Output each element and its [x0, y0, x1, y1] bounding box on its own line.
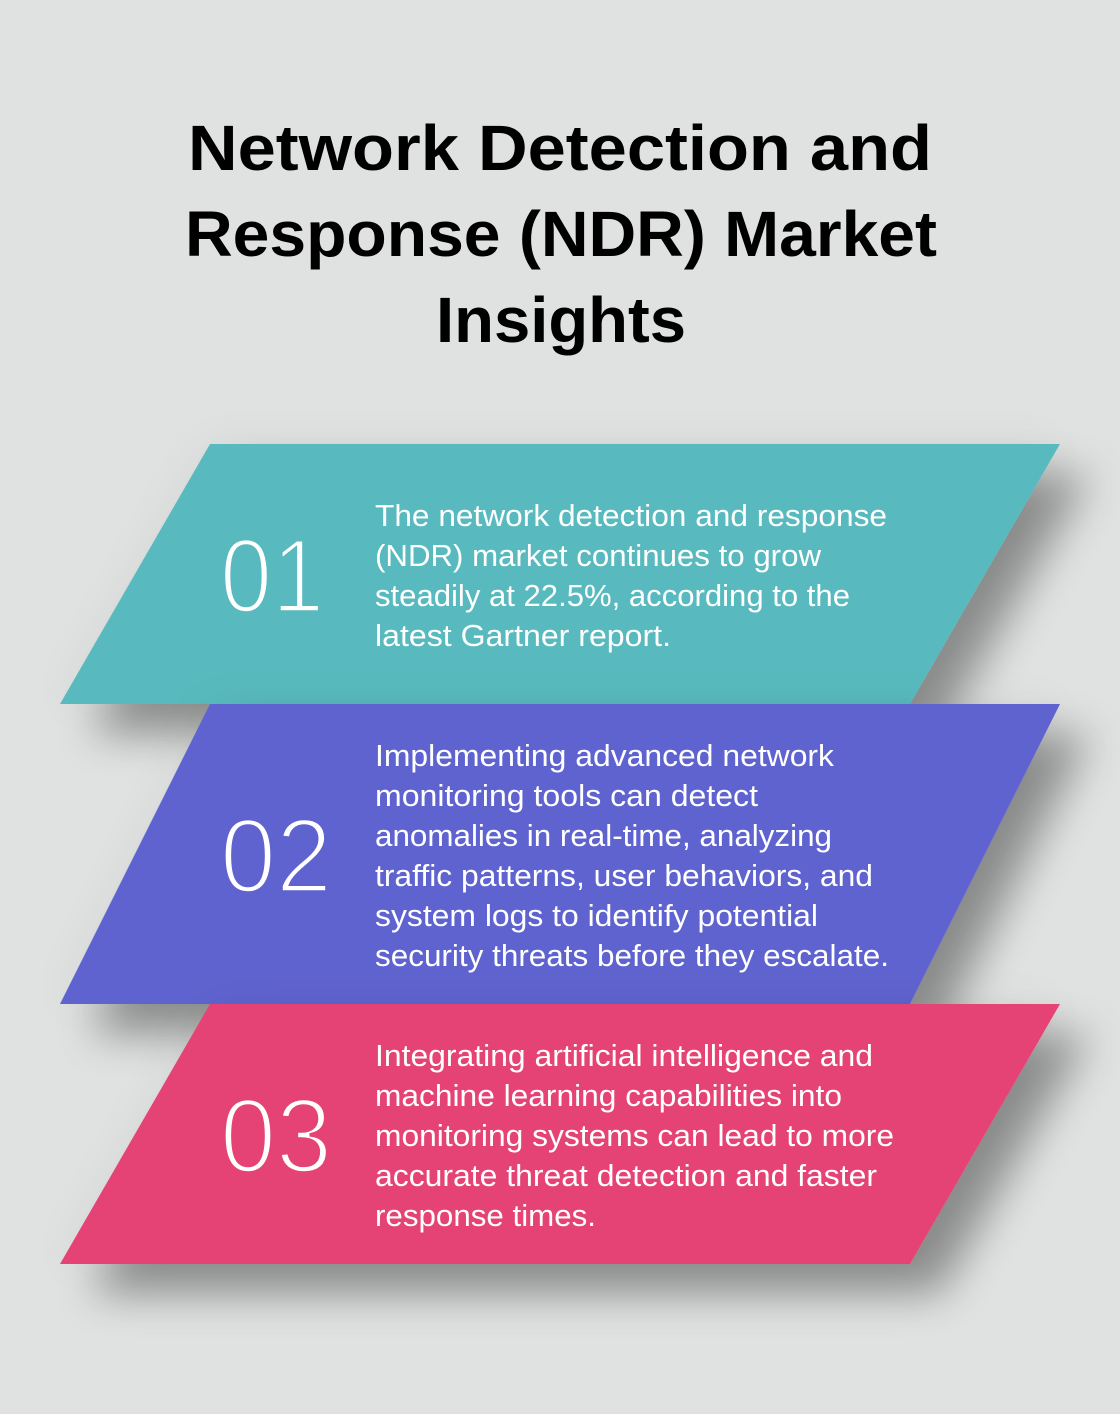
text: network monitoring: security threats before they escalate. [375, 938, 889, 973]
text: market growth: latest Gartner report. [375, 618, 671, 653]
text: AI and machine learning: machine learning capabilities into [375, 1078, 842, 1113]
text: AI and machine learning [375, 1038, 894, 1233]
text: market growth: (NDR) market continues to grow [375, 538, 822, 573]
text: network monitoring: Implementing advanced network [375, 738, 835, 773]
title: Insights [436, 284, 686, 356]
text: AI and machine learning: accurate threat detection and faster [375, 1158, 877, 1193]
title [185, 112, 937, 356]
text: network monitoring: monitoring tools can detect [375, 778, 758, 813]
blue parallelogram [60, 704, 1060, 1004]
text: market growth: steadily at 22.5%, according to the [375, 578, 850, 613]
text: network monitoring: system logs to identify potential [375, 898, 818, 933]
panel: 03 AI and machine learning [60, 1004, 1060, 1264]
teal parallelogram [60, 444, 1060, 704]
number 02: 02 [220, 798, 332, 915]
text: AI and machine learning: monitoring systems can lead to more [375, 1118, 894, 1153]
title: Response (NDR) Market [185, 198, 937, 270]
number 01: 01 [220, 518, 324, 635]
text: network monitoring: traffic patterns, user behaviors, and [375, 858, 873, 893]
text: market growth [375, 498, 887, 653]
text: market growth: The network detection and response [375, 498, 887, 533]
panel: 01 market growth [60, 444, 1060, 704]
text: AI and machine learning: response times. [375, 1198, 596, 1233]
title: Network Detection and [188, 112, 932, 184]
text: network monitoring [375, 738, 889, 973]
number 03: 03 [220, 1078, 332, 1195]
text: AI and machine learning: Integrating artificial intelligence and [375, 1038, 873, 1073]
pink parallelogram [60, 1004, 1060, 1264]
panel: 02 network monitoring [60, 704, 1060, 1004]
text: network monitoring: anomalies in real-time, analyzing [375, 818, 832, 853]
